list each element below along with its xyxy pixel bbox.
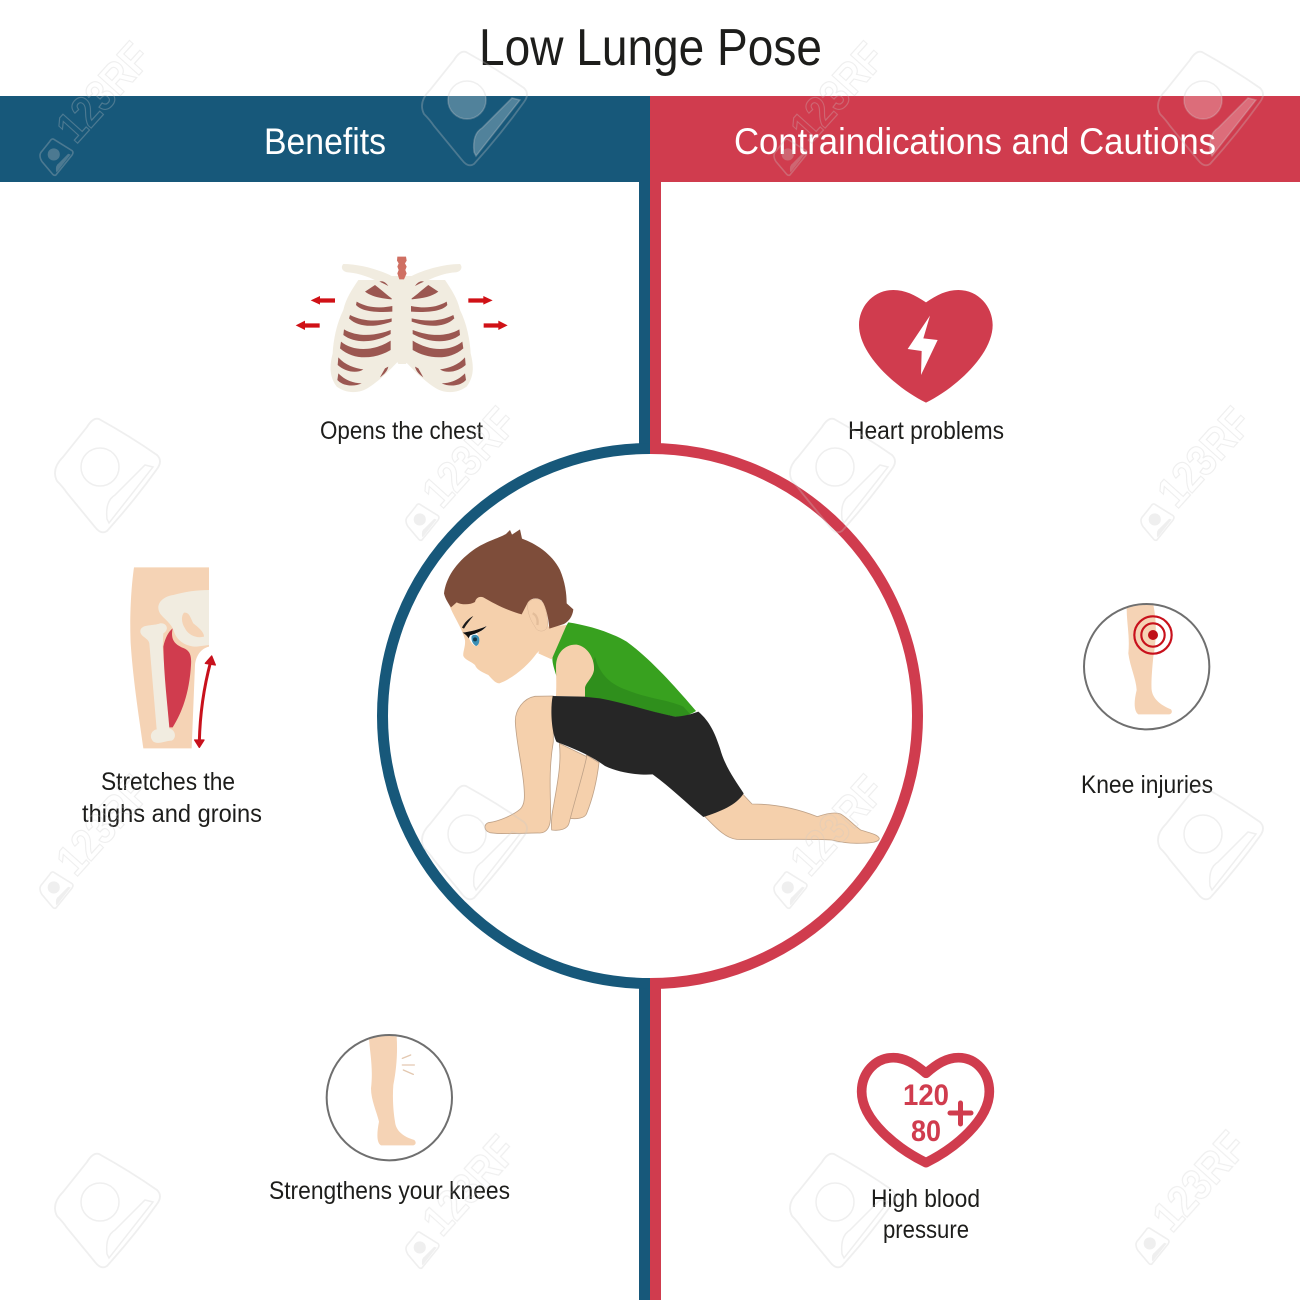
watermark overlay: 123RF (1148, 398, 1261, 517)
label: stretches the thighs and groins: thighs and groins (82, 800, 262, 828)
label: stretches the thighs and groins (82, 768, 262, 828)
watermark overlay: 123RF (781, 33, 894, 152)
icon: blood pressure heart (862, 1058, 989, 1163)
eye (463, 626, 487, 646)
reading: 120 over 80 (903, 1079, 949, 1148)
arrows (296, 296, 508, 330)
panel: benefits header (0, 96, 650, 182)
heading: benefits: Benefits (264, 121, 386, 162)
shirt (552, 622, 696, 717)
watermark highlights on header band (448, 96, 1256, 156)
watermark overlay: 123RF (1143, 1122, 1256, 1241)
far arm (567, 755, 599, 819)
watermark overlay: 123RF (47, 766, 160, 885)
center divider (639, 182, 661, 1300)
icon: lightning bolt (908, 316, 938, 375)
eyebrow (462, 616, 473, 629)
face (449, 593, 549, 683)
panel: contraindications header (650, 96, 1300, 182)
front leg (485, 696, 553, 834)
shorts (551, 696, 744, 817)
label: strengthens your knees: Strengthens your knees (269, 1177, 510, 1205)
near forearm (551, 743, 587, 830)
label: high blood pressure: pressure (883, 1216, 969, 1244)
center circle (382, 448, 918, 984)
reading: 120 over 80: 120 (903, 1079, 949, 1112)
reading: 120 over 80: 80 (911, 1115, 941, 1148)
watermark overlay: 123RF (413, 398, 526, 517)
upper arm (556, 645, 594, 697)
label: high blood pressure: High blood (871, 1185, 980, 1213)
label: stretches the thighs and groins: Stretches the (101, 768, 235, 796)
figure: person in low lunge pose (444, 529, 879, 843)
watermark overlay: 123RF (47, 33, 160, 152)
label: opens the chest: Opens the chest (320, 417, 483, 445)
icon: rib cage (296, 257, 508, 392)
lungs between ribs (337, 281, 392, 386)
icon: knee injury in circle (1084, 604, 1209, 729)
shirt shadow (583, 657, 690, 717)
watermark overlay: 123RF (781, 766, 894, 885)
icon: strengthened leg in circle (327, 1035, 452, 1160)
icon: heart with lightning bolt (859, 290, 993, 403)
icon: plus (950, 1103, 971, 1124)
icon: thigh muscle (130, 567, 215, 748)
heading: contraindications: Contraindications and Cautions (734, 121, 1216, 162)
bones (331, 264, 473, 392)
spine (397, 257, 407, 279)
back leg (705, 794, 879, 843)
label: high blood pressure (871, 1185, 980, 1244)
ear (527, 599, 547, 631)
watermark overlay: 123RF (413, 1126, 526, 1245)
neck (538, 625, 567, 659)
label: knee injuries: Knee injuries (1081, 771, 1213, 799)
title: Low Lunge Pose (479, 19, 822, 77)
hair (444, 529, 573, 629)
label: heart problems: Heart problems (848, 417, 1004, 445)
